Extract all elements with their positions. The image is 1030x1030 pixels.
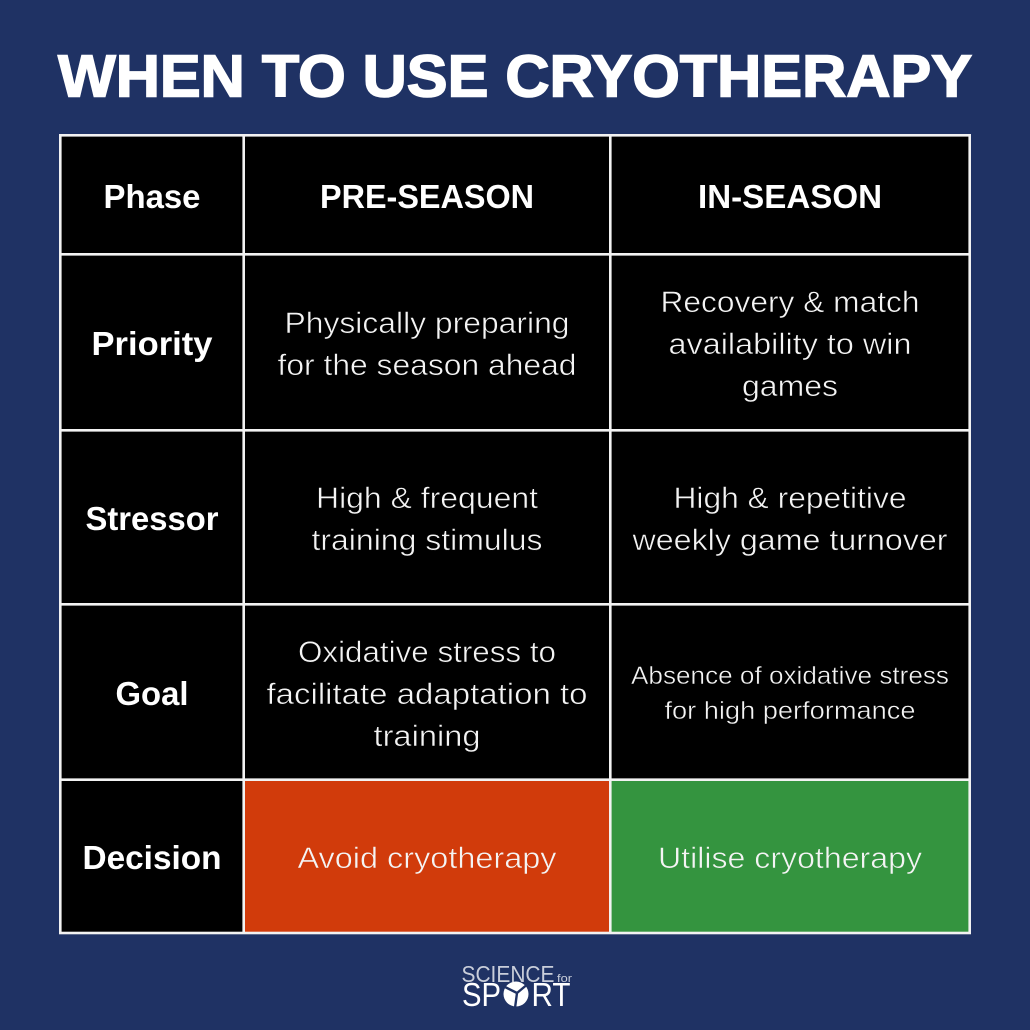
logo: science for sport: SCIENCE [462, 961, 554, 987]
row: stressor: High & repetitive [674, 482, 906, 515]
table [60, 135, 970, 933]
table background [60, 135, 970, 933]
logo: science for sport: for [557, 973, 572, 985]
icon: ball [503, 982, 529, 1008]
row: phase: Phase [104, 178, 200, 215]
row: goal: Absence of oxidative stress [631, 662, 949, 690]
row: phase: IN-SEASON [698, 178, 882, 215]
row: decision: Decision [82, 839, 222, 876]
row: goal: facilitate adaptation to [266, 678, 588, 711]
logo: science for sport: SP [462, 976, 501, 1013]
row: stressor: Stressor [86, 500, 219, 537]
row: decision [82, 839, 922, 876]
row: stressor: weekly game turnover [631, 524, 948, 557]
row: priority: Priority [92, 325, 213, 362]
decision cell: utilise [610, 780, 970, 933]
row: stressor [86, 482, 948, 557]
logo: science for sport [462, 961, 572, 1013]
row: goal: Goal [116, 675, 188, 712]
row: stressor: High & frequent [316, 482, 539, 515]
decision cell: avoid [244, 780, 610, 933]
logo: science for sport: RT [532, 976, 570, 1013]
row: goal: training [374, 720, 480, 753]
row: stressor: training stimulus [312, 524, 542, 557]
row: decision: Avoid cryotherapy [298, 842, 556, 875]
row: decision: Utilise cryotherapy [658, 842, 922, 875]
row: phase: PRE-SEASON [320, 178, 534, 215]
grid lines [60, 135, 970, 933]
row: priority: Physically preparing [284, 307, 570, 340]
row: priority [92, 286, 920, 403]
row: priority: Recovery & match [660, 286, 920, 319]
row: priority: games [742, 370, 838, 403]
row: goal: Oxidative stress to [298, 636, 556, 669]
title: WHEN TO USE CRYOTHERAPY [58, 44, 972, 110]
row: phase [104, 178, 882, 215]
row: priority: availability to win [668, 328, 912, 361]
row: goal [116, 636, 949, 753]
row: priority: for the season ahead [278, 349, 576, 382]
row: goal: for high performance [664, 697, 916, 725]
